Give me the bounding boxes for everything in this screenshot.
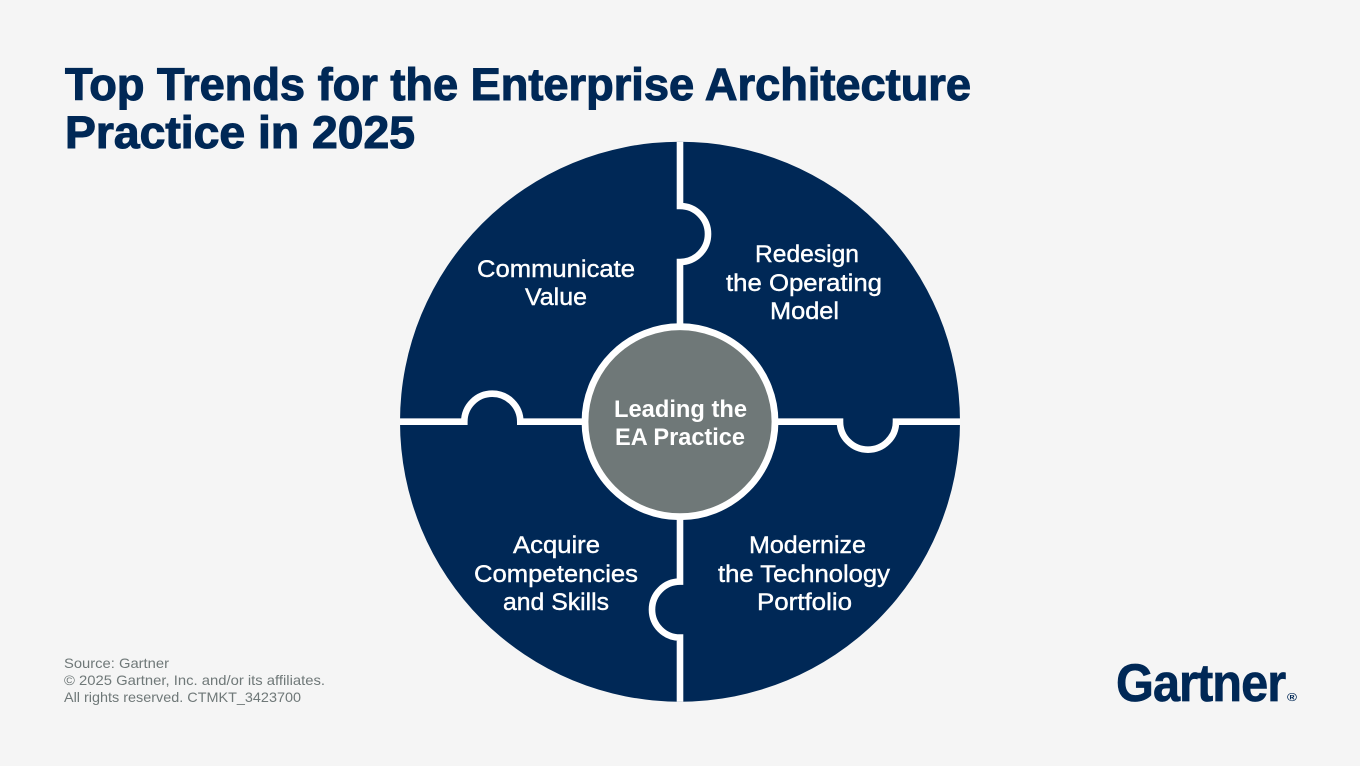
panel: Redesign the Operating Model: Model [770, 298, 839, 325]
center circle: Leading the EA Practice [585, 327, 775, 517]
panel: Acquire Competencies and Skills [400, 394, 680, 702]
center circle: Leading the EA Practice: Leading the [614, 396, 747, 423]
title [65, 59, 971, 158]
source and copyright note: © 2025 Gartner, Inc. and/or its affiliates. [64, 672, 325, 688]
puzzle circle diagram [400, 142, 960, 702]
source and copyright note [64, 655, 325, 705]
title: Top Trends for the Enterprise Architecture [65, 59, 971, 110]
panel: Modernize the Technology Portfolio: the Technology [718, 561, 890, 588]
panel: Modernize the Technology Portfolio: Modernize [749, 532, 866, 559]
panel: Modernize the Technology Portfolio [652, 422, 960, 702]
panel: Modernize the Technology Portfolio: Portfolio [757, 589, 852, 616]
source and copyright note: Source: Gartner [64, 655, 169, 671]
title: Practice in 2025 [65, 107, 415, 158]
Gartner logo: Gartner [1116, 653, 1286, 712]
panel: Redesign the Operating Model: Redesign [755, 241, 859, 268]
source and copyright note: All rights reserved. CTMKT_3423700 [64, 689, 301, 705]
center circle: Leading the EA Practice: EA Practice [615, 424, 745, 451]
panel: Communicate Value [400, 142, 708, 422]
panel: Redesign the Operating Model: the Operating [726, 270, 882, 297]
panel: Redesign the Operating Model [680, 142, 960, 450]
Gartner logo: ® [1287, 692, 1297, 704]
panel: Communicate Value: Value [525, 284, 587, 311]
panel: Communicate Value: Communicate [477, 256, 635, 283]
panel: Acquire Competencies and Skills: Acquire [513, 532, 600, 559]
panel: Acquire Competencies and Skills: and Skills [503, 589, 609, 616]
panel: Acquire Competencies and Skills: Competencies [474, 561, 638, 588]
